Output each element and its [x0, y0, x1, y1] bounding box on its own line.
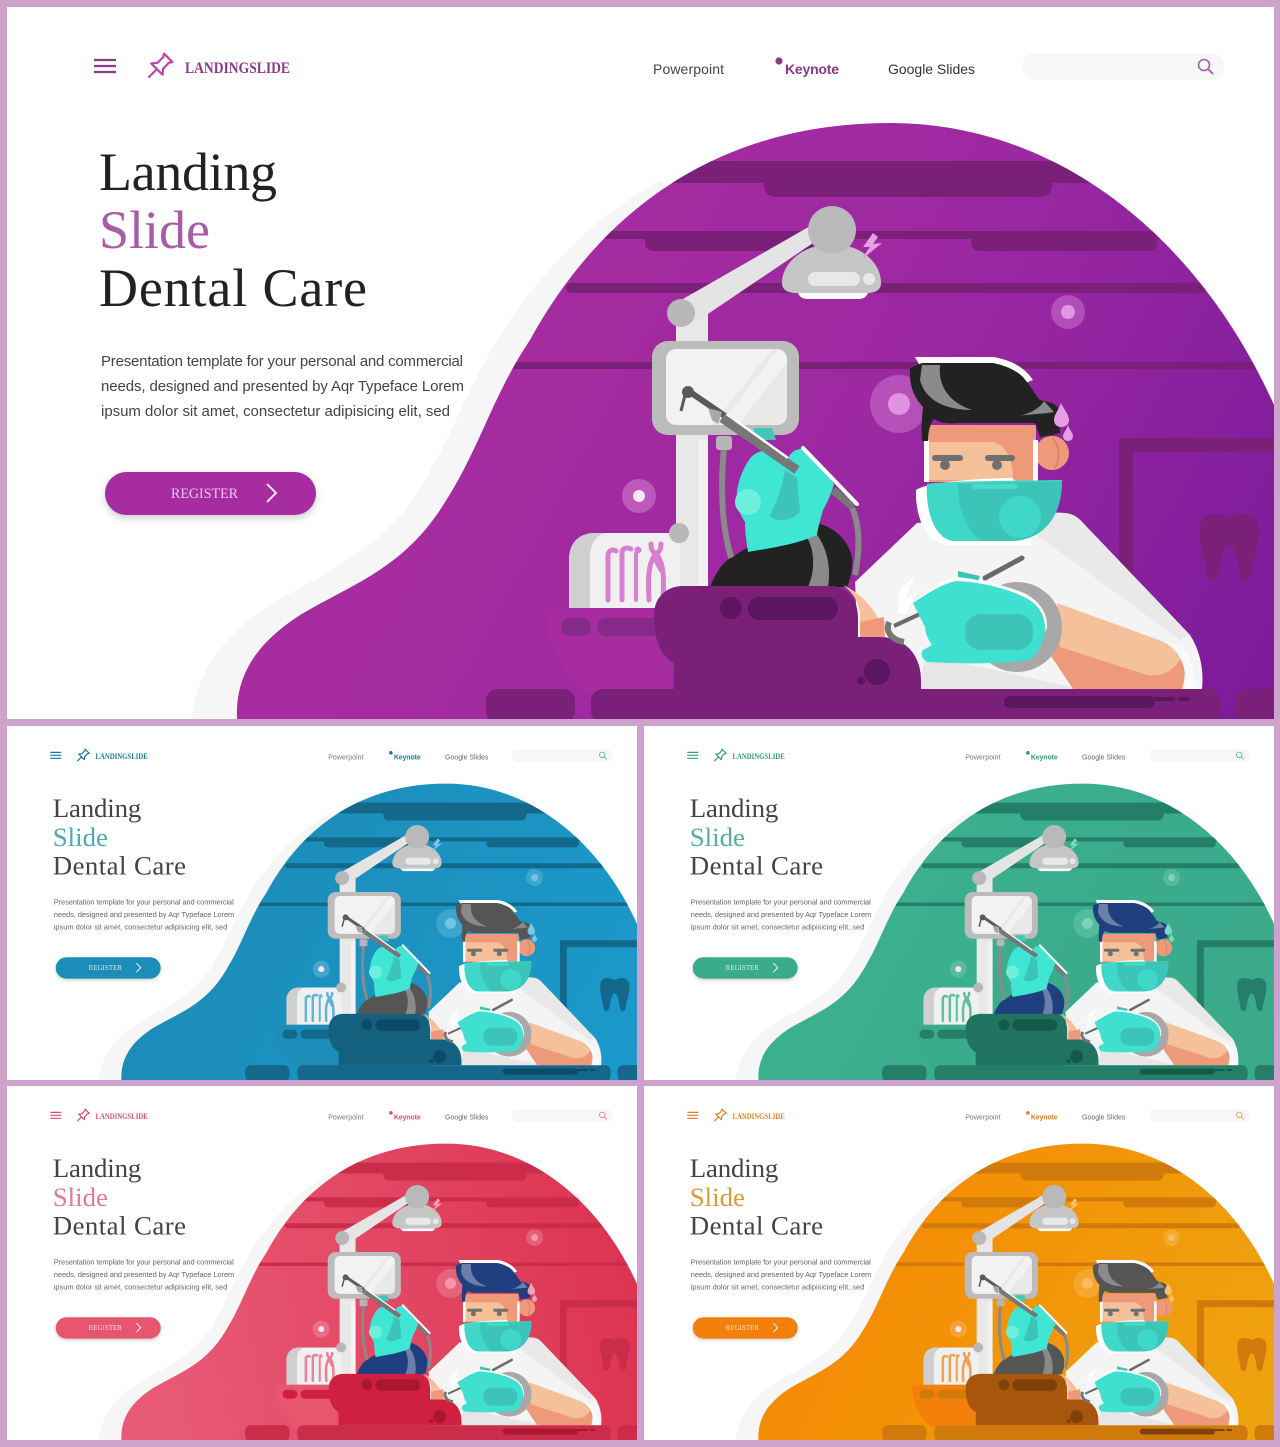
body text: [54, 1257, 234, 1291]
panel: main purple slide: [7, 7, 1274, 719]
nav: menu links: Google Slides: [445, 754, 489, 761]
nav: menu links: Google Slides: [888, 61, 975, 77]
nav: menu links: Powerpoint: [328, 754, 364, 761]
blue blob background: [121, 784, 637, 1080]
body text: Presentation template for your personal and commercial: [691, 1257, 871, 1266]
title: Slide: [690, 1182, 745, 1212]
dental lamp head: [782, 206, 881, 299]
purple blob background: [237, 123, 1274, 719]
title: [99, 142, 367, 318]
title: Slide: [53, 822, 108, 852]
background blob shadow: [99, 1172, 381, 1440]
body text: Presentation template for your personal and commercial: [54, 1257, 234, 1266]
nav: logo text: LANDINGSLIDE: [733, 1112, 785, 1121]
nav: menu links: Keynote: [394, 1114, 421, 1121]
panel: blue slide: [7, 726, 637, 1080]
nav: menu links: Google Slides: [445, 1114, 489, 1121]
chair details: [720, 597, 890, 685]
patient hair: [710, 520, 852, 587]
illustration: dentist at work: [790, 803, 1280, 1082]
illustration: dentist at work: [153, 803, 647, 1082]
right glove with instrument: [888, 558, 1062, 672]
nav: menu links: Powerpoint: [328, 1114, 364, 1121]
nav: logo pin icon: [143, 52, 174, 83]
body text: Presentation template for your personal and commercial: [691, 897, 871, 906]
illustration: dentist at work: [300, 161, 1280, 723]
nav: menu links: [965, 1111, 1126, 1121]
dentist: forearm: [1047, 603, 1202, 689]
register button: [56, 1317, 161, 1339]
body text: ipsum dolor sit amet, consectetur adipisicing elit, sed: [101, 403, 450, 420]
nav: menu links: Powerpoint: [965, 1114, 1001, 1121]
patient chair: [654, 586, 921, 689]
nav: menu links: Google Slides: [1082, 754, 1126, 761]
body text: needs, designed and presented by Aqr Typeface Lorem: [691, 910, 871, 919]
drill shaft: [681, 386, 857, 507]
nav: logo text: LANDINGSLIDE: [185, 60, 290, 77]
background blob shadow: [99, 812, 381, 1080]
title: [690, 793, 823, 881]
nav: search box: [512, 1109, 612, 1122]
nav: menu links: Keynote: [394, 754, 421, 761]
icon: sweat drops: [1054, 403, 1073, 441]
nav: menu links: [328, 751, 489, 761]
title: Slide: [53, 1182, 108, 1212]
floor bars: [486, 689, 1280, 723]
body text: Presentation template for your personal and commercial: [54, 897, 234, 906]
red blob background: [121, 1144, 637, 1440]
dentist: face mask: [916, 478, 1062, 545]
title: Dental Care: [53, 851, 186, 881]
nav: menu links: Keynote: [1031, 754, 1058, 761]
icon: wall tooth: [1200, 514, 1259, 581]
register button: REGISTER: [726, 963, 759, 972]
nav: search box: [1022, 53, 1224, 80]
register button: [693, 957, 798, 979]
nav: logo pin icon: [75, 748, 90, 764]
nav: logo pin icon: [712, 748, 727, 764]
nav: menu icon: [50, 1112, 61, 1118]
title: Slide: [99, 200, 210, 260]
register button: [56, 957, 161, 979]
register button: [105, 472, 316, 515]
icon: lightning bolt: [860, 233, 882, 261]
body text: needs, designed and presented by Aqr Typeface Lorem: [54, 1270, 234, 1279]
left glove: [735, 449, 834, 552]
register button: REGISTER: [89, 1323, 122, 1332]
background blob shadow: [736, 812, 1018, 1080]
nav: menu links: [653, 57, 975, 77]
nav: logo text: LANDINGSLIDE: [733, 752, 785, 761]
title: [53, 793, 186, 881]
title: [690, 1153, 823, 1241]
hose tubes: [722, 448, 858, 575]
nav: menu links: Keynote: [785, 61, 839, 77]
body text: ipsum dolor sit amet, consectetur adipisicing elit, sed: [691, 1282, 864, 1291]
nav: menu links: [965, 751, 1126, 761]
body text: needs, designed and presented by Aqr Typeface Lorem: [691, 1270, 871, 1279]
panel: green slide: [644, 726, 1274, 1080]
dentist: head: [910, 357, 1069, 484]
nav: menu links: Keynote: [1031, 1114, 1058, 1121]
background blob shadow: [192, 180, 760, 719]
register button: [693, 1317, 798, 1339]
title: Landing: [53, 1153, 141, 1183]
background blob shadow: [736, 1172, 1018, 1440]
title: Slide: [690, 822, 745, 852]
panel: orange slide: [644, 1086, 1274, 1440]
nav: logo pin icon: [712, 1108, 727, 1124]
nav: menu icon: [50, 752, 61, 758]
illustration: dentist at work: [153, 1163, 647, 1442]
wall stripes: [300, 161, 1280, 640]
body text: [691, 897, 871, 931]
title: Dental Care: [690, 851, 823, 881]
nav: menu icon: [687, 1112, 698, 1118]
drill connector: [716, 428, 776, 450]
title: Dental Care: [99, 258, 367, 318]
dental tools: [608, 544, 663, 600]
nav: logo text: LANDINGSLIDE: [96, 752, 148, 761]
title: Landing: [53, 793, 141, 823]
nav: search box: [1149, 1109, 1249, 1122]
body text: [691, 1257, 871, 1291]
monitor mirror: [652, 341, 799, 435]
title: Dental Care: [53, 1211, 186, 1241]
nav: logo pin icon: [75, 1108, 90, 1124]
register button: REGISTER: [89, 963, 122, 972]
tool box: [569, 523, 689, 608]
floating dots: [622, 295, 1085, 513]
title: Dental Care: [690, 1211, 823, 1241]
nav: menu links: Google Slides: [1082, 1114, 1126, 1121]
body text: [101, 353, 464, 420]
patient shoulder: [843, 585, 885, 637]
dentist: eyes and brows: [932, 455, 1015, 470]
body text: needs, designed and presented by Aqr Typeface Lorem: [101, 378, 464, 395]
body text: ipsum dolor sit amet, consectetur adipisicing elit, sed: [54, 922, 227, 931]
register button: REGISTER: [171, 486, 238, 502]
title: Landing: [690, 1153, 778, 1183]
body text: [54, 897, 234, 931]
dental lamp arm and pole: [667, 225, 816, 608]
nav: menu links: Powerpoint: [653, 61, 724, 77]
illustration: dentist at work: [790, 1163, 1280, 1442]
title: Landing: [690, 793, 778, 823]
nav: logo text: LANDINGSLIDE: [96, 1112, 148, 1121]
body text: ipsum dolor sit amet, consectetur adipisicing elit, sed: [54, 1282, 227, 1291]
nav: menu links: [328, 1111, 489, 1121]
body text: ipsum dolor sit amet, consectetur adipisicing elit, sed: [691, 922, 864, 931]
body text: needs, designed and presented by Aqr Typeface Lorem: [54, 910, 234, 919]
green blob background: [758, 784, 1274, 1080]
panel: red slide: [7, 1086, 637, 1440]
nav: menu icon: [687, 752, 698, 758]
register button: REGISTER: [726, 1323, 759, 1332]
sink basin: [544, 608, 672, 695]
nav: search box: [512, 749, 612, 762]
title: Landing: [99, 142, 277, 202]
nav: search box: [1149, 749, 1249, 762]
body text: Presentation template for your personal and commercial: [101, 353, 463, 370]
orange blob background: [758, 1144, 1274, 1440]
nav: menu icon: [94, 60, 116, 72]
dentist: hair: [910, 363, 1060, 441]
dentist: coat: [855, 513, 1202, 689]
nav: menu links: Powerpoint: [965, 754, 1001, 761]
title: [53, 1153, 186, 1241]
